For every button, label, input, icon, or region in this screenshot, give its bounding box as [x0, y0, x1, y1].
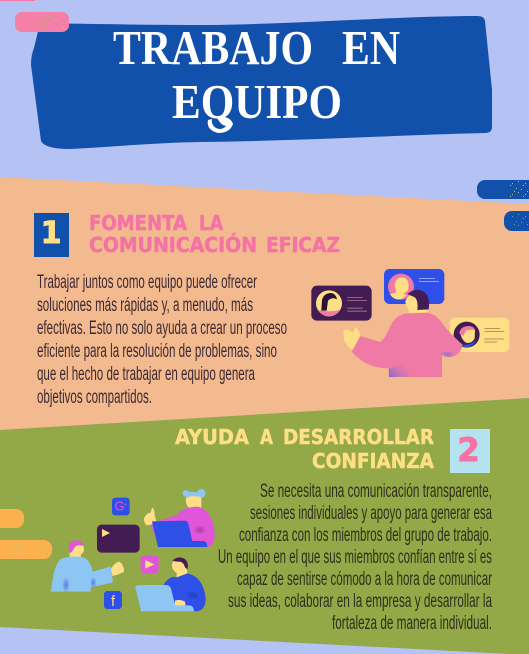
- heading: section 2: AYUDA: [175, 425, 249, 449]
- number badge 1: 1: [41, 216, 61, 251]
- person: right top with laptop: [144, 489, 215, 547]
- heading: section 2: A: [260, 425, 273, 449]
- icon: play: [141, 555, 159, 573]
- number badge 2: 2: [457, 431, 480, 469]
- pink tag: [15, 12, 69, 32]
- person: left with pink hair: [51, 540, 124, 593]
- illustration: person with video call cards: [311, 269, 509, 377]
- heading: section 2: CONFIANZA: [312, 449, 434, 473]
- title line 1: EN: [342, 20, 400, 75]
- heading: section 1: [89, 211, 340, 257]
- text block: section 1 body: que el hecho de trabajar en equipo genera: [37, 364, 255, 385]
- title line 1: TRABAJO: [113, 20, 313, 75]
- illustration: team collaborating online: [51, 489, 215, 611]
- blue pill upper: [477, 180, 529, 199]
- heading: section 2: [175, 425, 434, 473]
- yellow call card: [450, 318, 509, 352]
- icon: facebook: f: [111, 594, 116, 610]
- number badge 1: [34, 213, 69, 257]
- icon: google plus: [112, 498, 130, 515]
- title banner: [15, 12, 492, 149]
- person figure: [343, 290, 463, 377]
- swash of the Q: [208, 117, 233, 133]
- text block: section 1 body: objetivos compartidos.: [37, 387, 152, 408]
- blue call card: [384, 269, 444, 304]
- dark call card: [311, 286, 372, 321]
- heading: section 1: FOMENTA: [89, 211, 187, 235]
- banner brush shape: [31, 16, 492, 149]
- text block: section 1 body: soluciones más rápidas y, a menudo, más: [37, 295, 253, 316]
- heading: section 1: COMUNICACIÓN: [89, 233, 257, 257]
- blue pill lower: [504, 211, 529, 231]
- text block: section 1 body: efectivas. Esto no solo ayuda a crear un proceso: [37, 318, 287, 339]
- title line 2: EQUIPO: [172, 74, 342, 129]
- text block: section 2 body: [218, 481, 492, 634]
- orange pill upper: [0, 509, 24, 528]
- heading: section 1: EFICAZ: [266, 233, 340, 257]
- heading: section 1: LA: [199, 211, 223, 235]
- video player card: [97, 525, 140, 553]
- number badge 2: [450, 429, 490, 473]
- decorative pink strip at top edge: [0, 0, 35, 1]
- icon: facebook: [104, 591, 122, 610]
- icon: google plus: G: [115, 500, 125, 514]
- panel: section 1 peach band: [0, 177, 529, 430]
- text block: section 1 body: eficiente para la resolución de problemas, sino: [37, 341, 277, 362]
- text block: section 1 body: [37, 272, 287, 408]
- icon: google plus: +: [124, 502, 127, 508]
- heading: section 2: DESARROLLAR: [283, 425, 434, 449]
- panel: section 2 green band: [0, 398, 529, 654]
- text block: section 1 body: Trabajar juntos como equipo puede ofrecer: [37, 272, 257, 293]
- orange pill lower: [0, 540, 52, 559]
- person: right bottom with laptop: [135, 557, 206, 611]
